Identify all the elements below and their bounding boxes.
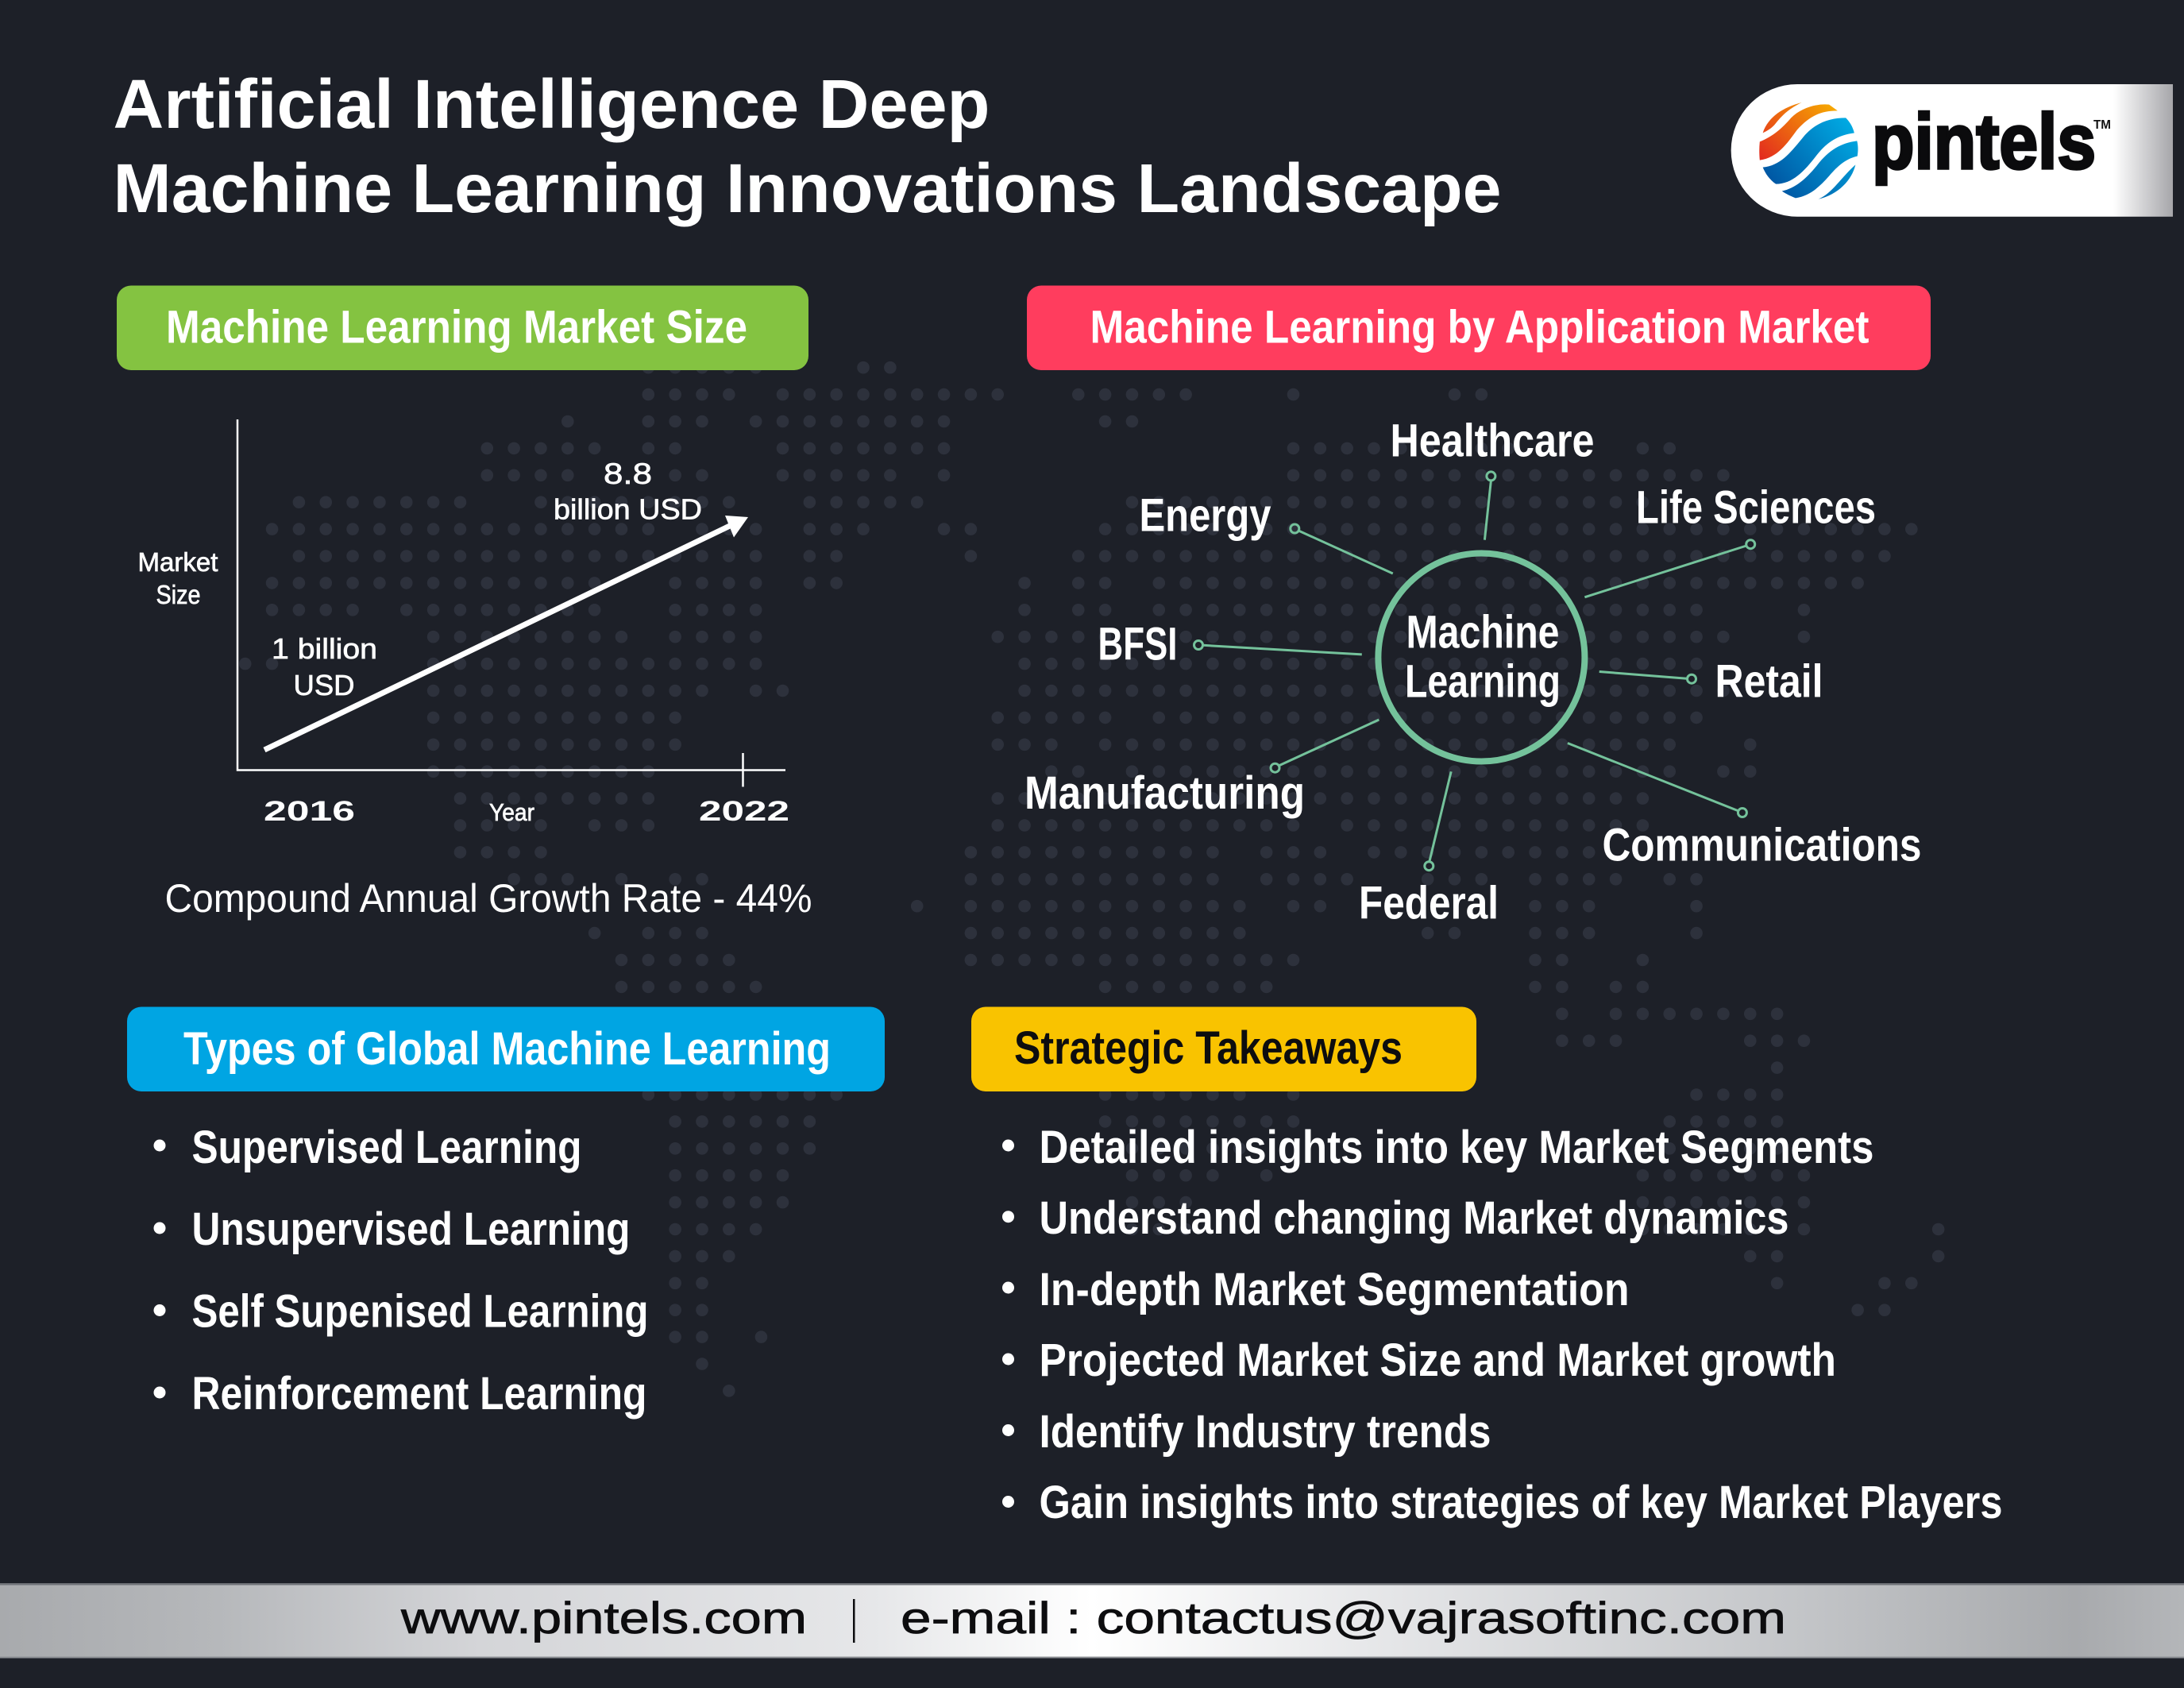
label: 1 billion USD: 1 billion (272, 632, 377, 665)
list: takeaways: Detailed insights into key Market Segments (1039, 1122, 1874, 1173)
dotted world map background (245, 368, 1939, 1391)
panel: market size (117, 286, 812, 921)
heading: takeaways (971, 1007, 1476, 1091)
x axis labels: 2016 (264, 796, 355, 827)
list: types (154, 1122, 648, 1420)
heading: market size: Machine Learning Market Size (166, 302, 747, 353)
list: types: Supervised Learning (192, 1122, 581, 1173)
logo wordmark: pintels (1872, 98, 2096, 185)
y axis label (138, 547, 218, 609)
label: 8.8 billion USD: 8.8 (604, 458, 652, 490)
line chart: market growth (138, 419, 789, 827)
title: Artificial Intelligence Deep (113, 66, 990, 143)
heading: application market: Machine Learning by Application Market (1090, 302, 1870, 353)
heading: types: Types of Global Machine Learning (183, 1023, 831, 1075)
list: types: Reinforcement Learning (192, 1368, 646, 1420)
label: 1 billion USD (272, 632, 377, 701)
label: 8.8 billion USD: billion USD (554, 492, 702, 526)
icon: swirl globe (1759, 102, 1858, 199)
trademark: TM (2093, 118, 2111, 132)
list: takeaways: Projected Market Size and Market growth (1039, 1335, 1836, 1386)
list: takeaways: In-depth Market Segmentation (1039, 1264, 1630, 1315)
y axis label: Size (156, 580, 200, 609)
hub circle: Learning (1405, 656, 1561, 707)
title (113, 66, 1501, 227)
x axis labels: 2022 (699, 796, 789, 827)
list: takeaways: Understand changing Market dynamics (1039, 1192, 1788, 1244)
hub circle (1378, 553, 1584, 761)
label: Life Sciences: Life Sciences (1636, 481, 1876, 534)
footer separator (853, 1599, 855, 1643)
label: Energy: Energy (1139, 489, 1271, 542)
hub diagram (1024, 415, 1922, 929)
panel: types (127, 1007, 885, 1420)
label: Manufacturing: Manufacturing (1024, 767, 1305, 819)
label: Communications: Communications (1603, 820, 1922, 871)
label: Retail: Retail (1715, 656, 1823, 707)
y axis label: Market (138, 547, 218, 577)
logo: pintels (1731, 84, 2173, 217)
heading: types (127, 1007, 885, 1091)
list: types: Unsupervised Learning (192, 1203, 631, 1255)
arrow: growth (264, 516, 748, 750)
heading: market size (117, 286, 808, 370)
title: Machine Learning Innovations Landscape (113, 150, 1501, 227)
footer band (0, 1583, 2184, 1659)
footer website: www.pintels.com (400, 1593, 807, 1643)
x axis labels (264, 796, 789, 827)
panel: applications (1024, 286, 1931, 929)
heading: application market (1027, 286, 1931, 370)
x axis labels: Year (489, 798, 534, 826)
list: takeaways (1002, 1122, 2003, 1528)
label: Healthcare: Healthcare (1390, 415, 1595, 467)
connector lines (1194, 472, 1755, 871)
list: types: Self Supenised Learning (192, 1285, 648, 1338)
label: 1 billion USD: USD (294, 669, 354, 701)
label: Federal: Federal (1359, 877, 1499, 929)
heading: takeaways: Strategic Takeaways (1014, 1022, 1403, 1074)
hub circle: Machine (1406, 607, 1560, 658)
text: CAGR: Compound Annual Growth Rate - 44% (165, 876, 812, 921)
label: 8.8 billion USD (554, 458, 702, 526)
list: takeaways: Gain insights into strategies of key Market Players (1039, 1477, 2003, 1528)
label: BFSI: BFSI (1098, 618, 1177, 670)
list: takeaways: Identify Industry trends (1039, 1406, 1491, 1458)
panel: takeaways (971, 1007, 2003, 1528)
footer email: e-mail : contactus@vajrasoftinc.com (901, 1593, 1786, 1643)
